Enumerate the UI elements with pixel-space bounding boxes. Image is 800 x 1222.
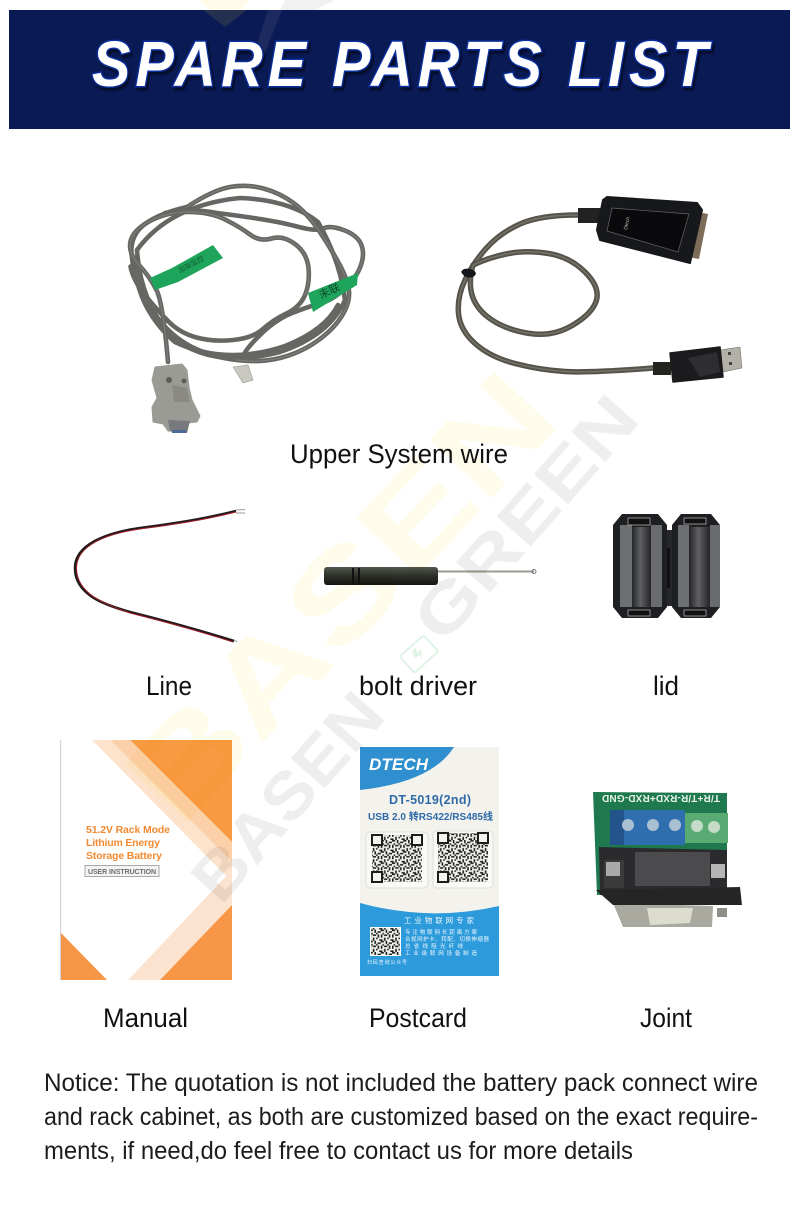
photo: red and black line — [75, 510, 245, 642]
label: Joint: Joint — [640, 1003, 692, 1033]
label: Manual: Manual — [103, 1003, 188, 1033]
RJ45 plug — [233, 365, 253, 383]
photo: USB to serial adapter cable — [458, 197, 742, 382]
postcard heading — [368, 793, 493, 823]
USB plug — [653, 347, 742, 382]
postcard bottom text: 合规网护卡、转配、切换伸缩器 — [405, 935, 489, 943]
manual badge: USER INSTRUCTION — [88, 869, 156, 876]
postcard logo: DTECH — [369, 755, 429, 774]
label: lid: lid — [653, 671, 679, 701]
title: SPARE PARTS LIST — [92, 28, 712, 100]
label: Postcard: Postcard — [369, 1003, 467, 1033]
postcard heading: DT-5019(2nd) — [389, 793, 471, 807]
watermark: BASEN — [99, 346, 583, 848]
photo: postcard — [360, 747, 499, 976]
photo: manual cover — [60, 740, 232, 980]
green tag left — [150, 245, 223, 290]
label: bolt driver: bolt driver — [359, 671, 477, 701]
green tag right — [308, 273, 358, 312]
green tag right: 未联 — [317, 281, 342, 302]
DB9 connector grey — [152, 364, 200, 433]
manual title: Lithium Energy — [86, 837, 160, 849]
watermark — [99, 0, 653, 915]
notice text: and rack cabinet, as both are customized based on the exact require- — [44, 1103, 758, 1131]
green terminal block — [685, 813, 728, 843]
QR code cards — [366, 831, 493, 888]
notice text — [44, 1069, 758, 1165]
black DB connector — [596, 847, 742, 927]
postcard bottom text — [367, 915, 489, 966]
cable tie — [462, 269, 475, 277]
label: Upper System wire: Upper System wire — [290, 439, 508, 469]
manual title: 51.2V Rack Mode — [86, 824, 170, 836]
icon: battery watermark — [400, 635, 438, 673]
postcard heading: USB 2.0 转RS422/RS485线 — [368, 810, 493, 823]
header banner — [9, 10, 790, 129]
label: Line: Line — [146, 671, 192, 701]
green tag left: 加架监控 — [177, 254, 206, 275]
manual title: Storage Battery — [86, 850, 162, 862]
postcard bottom text: 工业物联网专家 — [404, 915, 474, 925]
watermark: GREEN — [398, 381, 653, 655]
photo: serial cable with green tags — [130, 186, 363, 433]
photo: ferrite lid — [613, 514, 720, 618]
postcard bottom text: 专注物联网长距离方案 — [405, 928, 477, 936]
postcard bottom text: 总省线阻光纤线 — [405, 942, 463, 950]
adapter body: Dtech — [623, 216, 632, 230]
photo: bolt driver — [324, 567, 536, 585]
watermark: BASEN — [176, 677, 398, 915]
postcard bottom text: 工业级联网设备制造 — [405, 949, 477, 957]
adapter body — [578, 197, 708, 263]
blue terminal block — [610, 810, 685, 845]
manual title — [86, 824, 170, 862]
manual badge — [85, 866, 159, 876]
postcard bottom text: 扫码查询公众号 — [367, 959, 407, 966]
small QR code — [370, 927, 401, 956]
photo: terminal joint — [593, 792, 742, 927]
notice text: Notice: The quotation is not included the battery pack connect wire — [44, 1069, 758, 1097]
board markings upside down: T/R+T/R-RXD+RXD-GND — [602, 792, 720, 803]
notice text: ments, if need,do feel free to contact us for more details — [44, 1137, 633, 1165]
